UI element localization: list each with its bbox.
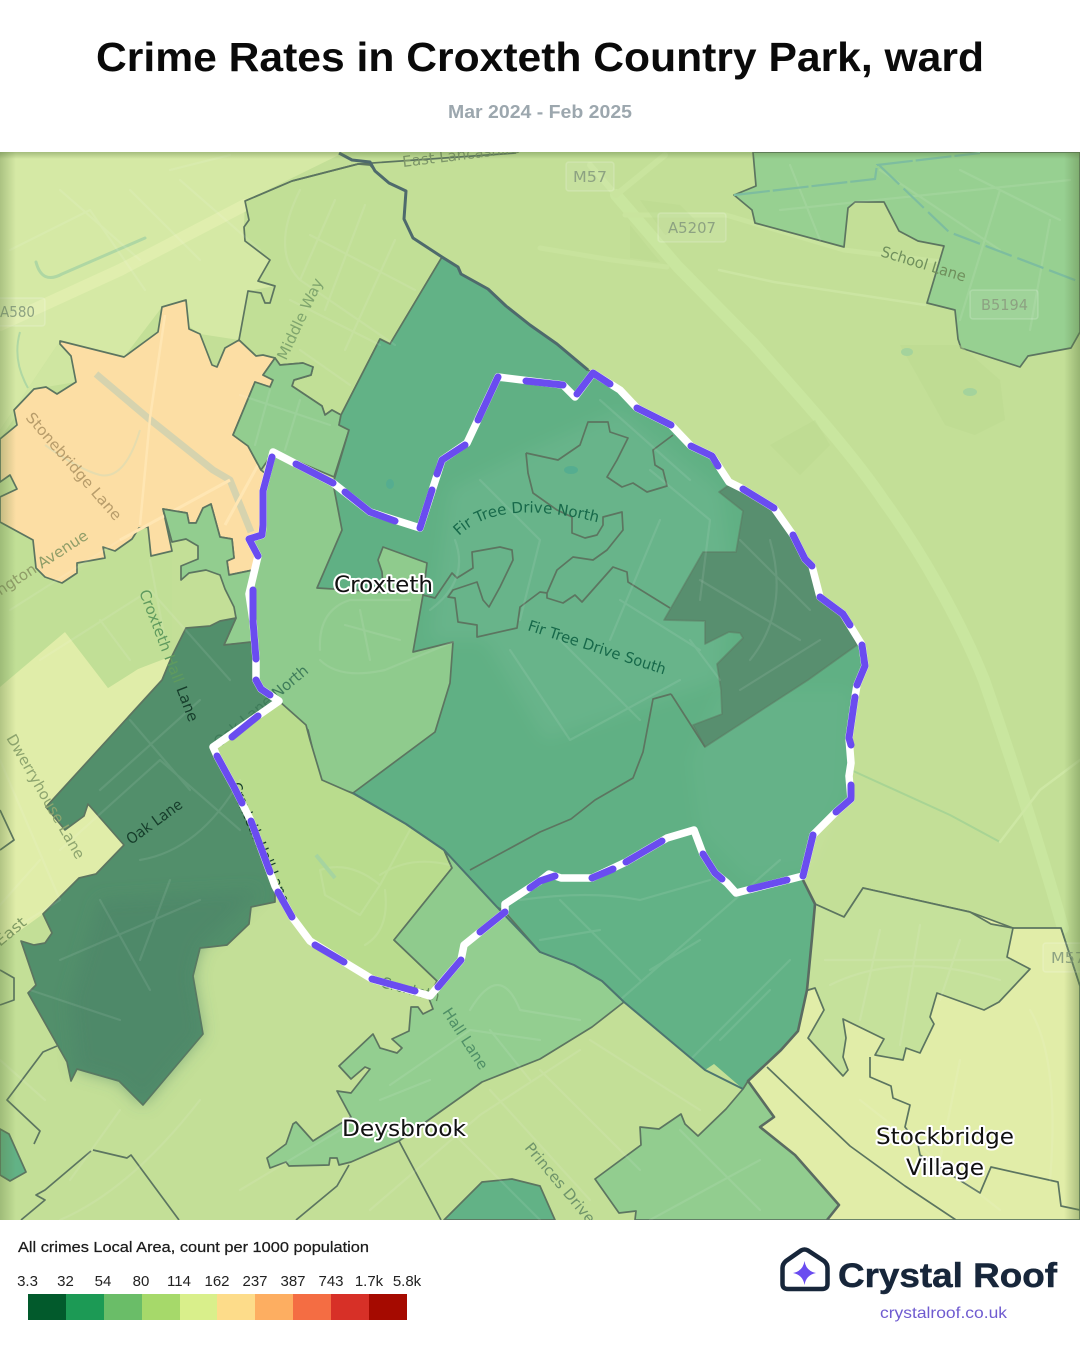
- area: ward interior green: [318, 378, 862, 909]
- ward boundary: white base with purple dashes: [213, 373, 865, 996]
- legend scale labels: 32: [57, 1273, 74, 1290]
- legend scale labels: 743: [318, 1273, 344, 1290]
- road labels: Oak Lane North: [210, 661, 312, 751]
- legend scale labels: 114: [167, 1273, 191, 1290]
- road number signs: A580: [0, 303, 35, 321]
- road labels: Dwerryhouse Lane: [3, 731, 89, 862]
- area: Stockbridge north green: [805, 888, 1030, 1076]
- place labels: Village: [906, 1156, 984, 1181]
- road labels: Croxteth Hall Lane: [135, 587, 202, 724]
- legend colour bar: [28, 1294, 407, 1320]
- area: small mid green: [394, 850, 505, 996]
- subtitle: date range: Mar 2024 - Feb 2025: [448, 102, 632, 122]
- icon: house with star: [782, 1250, 828, 1289]
- woodland patches: [959, 345, 966, 350]
- road labels: Fir Tree Drive South: [526, 617, 668, 678]
- area: park light lime: [213, 701, 452, 996]
- area: mid green west patch: [163, 504, 256, 645]
- road number signs: A5207: [668, 219, 716, 237]
- title: Crime Rates in Croxteth Country Park, ward: [96, 34, 984, 80]
- road number signs: M57: [573, 168, 607, 186]
- area: Croxteth light green: [249, 452, 453, 793]
- legend title: All crimes Local Area, count per 1000 population: [18, 1239, 369, 1256]
- area: bottom centre green: [444, 1179, 555, 1220]
- legend scale labels: 80: [133, 1273, 149, 1290]
- place labels: [334, 573, 1014, 1181]
- area: Deysbrook green: [267, 912, 624, 1168]
- website url: crystalroof.co.uk: [880, 1305, 1008, 1322]
- road number signs: [0, 162, 1080, 972]
- motorway across orange block: [96, 374, 251, 532]
- road labels: Middle Way: [273, 275, 327, 363]
- roads: motorway and main roads: [4, 199, 1078, 843]
- area: dark green east block: [664, 485, 857, 747]
- road labels: Croxteth Hall Lane: [226, 780, 294, 906]
- area: Middle Way block: [239, 164, 442, 415]
- place labels: Stockbridge: [876, 1125, 1014, 1150]
- road number signs: B5194: [981, 296, 1028, 314]
- legend: [17, 1239, 422, 1320]
- logo wordmark: Crystal Roof: [838, 1257, 1058, 1295]
- legend scale labels: 162: [204, 1273, 230, 1290]
- road labels: Princes Drive: [521, 1139, 599, 1227]
- water features: [316, 153, 1080, 878]
- area: mid green above boundary: [233, 358, 349, 477]
- area: Stockbridge Village yellow: [748, 888, 1080, 1220]
- road labels: [0, 152, 965, 1268]
- road labels: Croxteth: [379, 973, 442, 1005]
- legend scale labels: 237: [242, 1273, 268, 1290]
- area: far-left green fragment: [0, 1129, 26, 1181]
- legend scale labels: 1.7k: [355, 1273, 384, 1290]
- legend scale labels: 3.3: [17, 1273, 38, 1290]
- area: bottom right green: [595, 1081, 839, 1220]
- logo: Crystal Roof: [782, 1250, 1058, 1322]
- road labels: School Lane: [879, 243, 968, 286]
- area: south block green: [505, 830, 815, 1089]
- road labels: Fir Tree Drive North: [452, 501, 598, 535]
- area: dark green west block: [21, 618, 279, 1105]
- road labels: Stonebridge Lane: [22, 409, 125, 524]
- river boundary lines: [339, 153, 839, 1220]
- legend scale labels: [17, 1273, 422, 1290]
- area: Croxteth north green block: [333, 257, 593, 528]
- area: orange high-crime block: [0, 300, 275, 583]
- estate street network: [0, 155, 1070, 1220]
- ward sub-boundaries: [0, 153, 1080, 1220]
- legend scale labels: 387: [280, 1273, 306, 1290]
- road labels: Oak Lane: [123, 795, 186, 848]
- road labels: East Lancashire Road: [401, 134, 563, 171]
- place labels: Deysbrook: [342, 1117, 466, 1142]
- place labels: Croxteth: [334, 573, 433, 598]
- legend scale labels: 5.8k: [393, 1273, 422, 1290]
- area: top right green: [734, 152, 1080, 367]
- road labels: Hall Lane: [439, 1004, 492, 1073]
- legend scale labels: 54: [95, 1273, 111, 1290]
